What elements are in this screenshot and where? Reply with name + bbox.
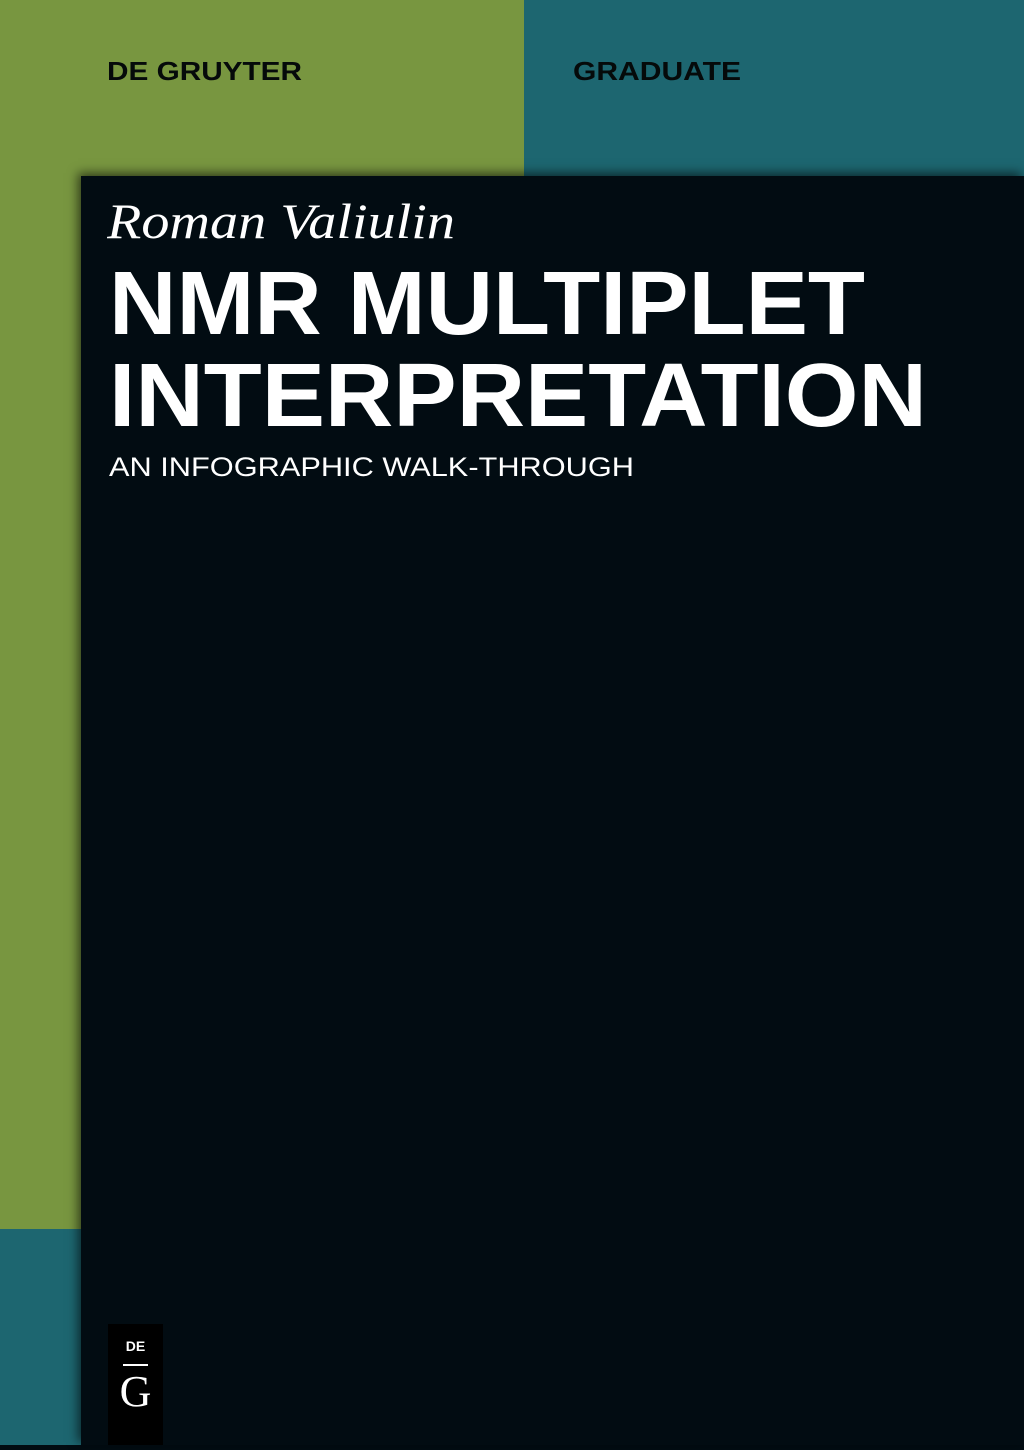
publisher label: DE GRUYTER	[107, 56, 302, 86]
title	[109, 262, 927, 432]
panel: green block	[0, 0, 524, 1229]
subtitle: AN INFOGRAPHIC WALK-THROUGH	[109, 452, 634, 482]
series label: GRADUATE	[573, 56, 741, 86]
panel: teal top block	[524, 0, 1024, 176]
panel: teal bottom-left block	[0, 1229, 81, 1445]
author: Roman Valiulin	[107, 194, 455, 249]
icon: publisher logo: G	[120, 1367, 151, 1416]
icon: publisher logo: DE	[126, 1338, 145, 1354]
icon: publisher logo	[108, 1324, 163, 1445]
